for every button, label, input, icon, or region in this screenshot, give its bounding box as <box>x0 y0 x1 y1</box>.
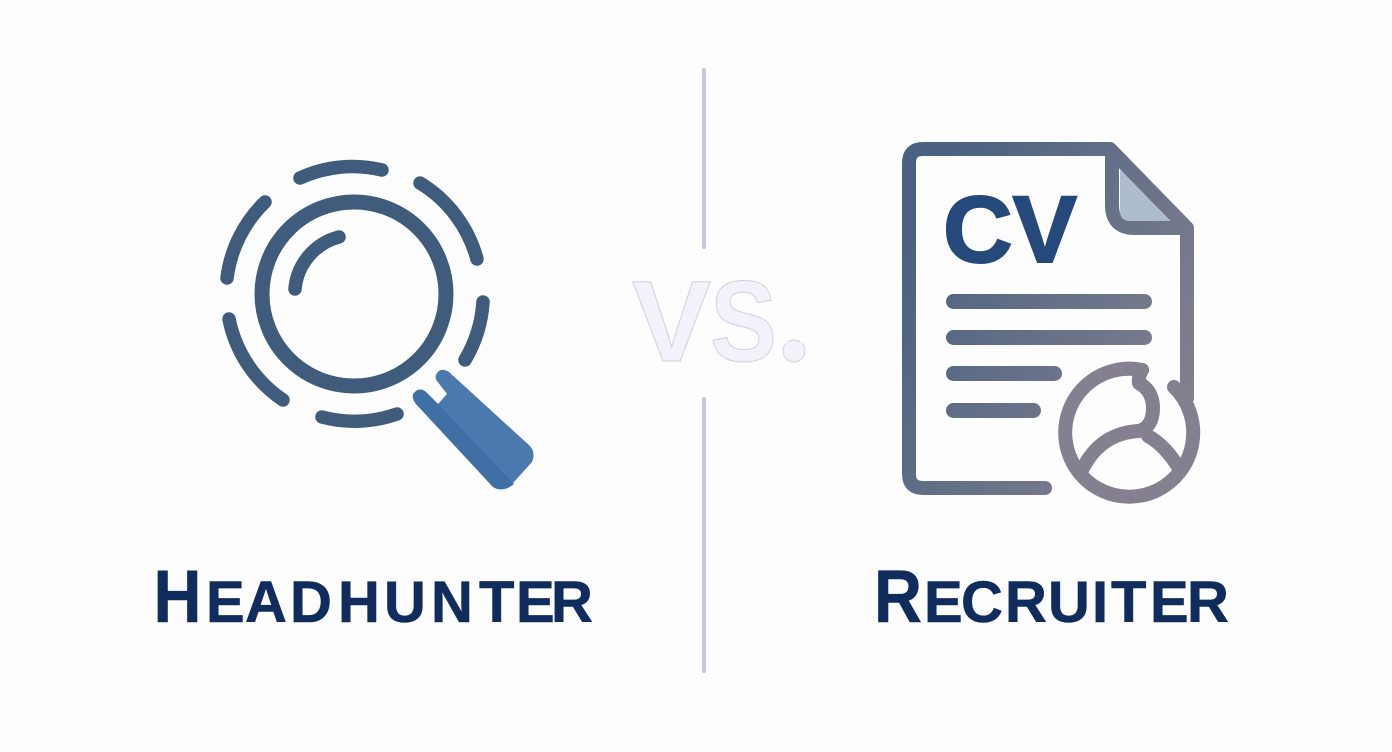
fold shading <box>1120 169 1170 221</box>
cv text: CV <box>943 177 1077 283</box>
radar dashes around lens <box>227 167 483 421</box>
heading: recruiter: ECRUITER <box>924 570 1229 635</box>
divider: top <box>702 68 706 249</box>
panel: headhunter <box>154 167 593 638</box>
document outline <box>909 149 1187 488</box>
vs label: . <box>778 256 810 384</box>
divider: bottom <box>702 397 706 673</box>
text lines <box>954 302 1144 410</box>
icon: magnifying glass <box>227 167 534 489</box>
lens highlight <box>295 237 339 289</box>
heading: headhunter: H <box>154 555 202 638</box>
handle <box>413 370 534 489</box>
vs label <box>632 256 810 386</box>
vs label: V <box>632 258 711 386</box>
heading: recruiter: R <box>874 555 922 638</box>
page fold <box>1112 152 1187 228</box>
panel: recruiter <box>874 149 1229 638</box>
lens ring <box>262 202 446 386</box>
heading: headhunter: EADHUNTER <box>206 570 593 635</box>
vs label: S <box>710 258 777 386</box>
profile badge <box>1065 369 1193 497</box>
icon: cv document <box>909 149 1193 497</box>
